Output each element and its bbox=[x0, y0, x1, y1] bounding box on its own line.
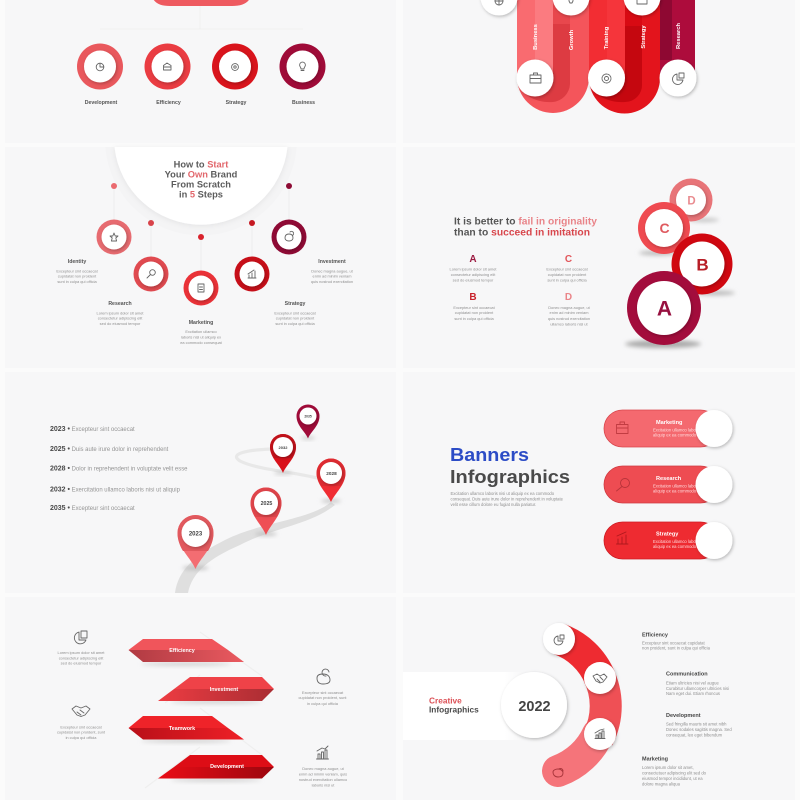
heading: It is better to fail in originality bbox=[454, 216, 597, 228]
ring: strategy: Strategy bbox=[226, 100, 246, 106]
icon and text: bar chart: enim ad minim veniam, quis bbox=[299, 772, 347, 776]
text: marketing: dolore magna aliqua bbox=[642, 782, 681, 786]
band: research bbox=[660, 0, 695, 78]
text: marketing: Marketing bbox=[642, 756, 668, 762]
heading bbox=[454, 216, 597, 238]
ball C: C bbox=[659, 220, 670, 236]
icon and text: pie chart: sed do eiusmod tempor bbox=[61, 660, 102, 666]
circle: top icon nodes bbox=[480, 0, 660, 16]
text block C: C bbox=[565, 254, 572, 265]
step: marketing: Marketing bbox=[189, 320, 213, 326]
heading bbox=[450, 445, 570, 487]
bottom icons bbox=[530, 73, 684, 85]
ball C bbox=[638, 202, 690, 256]
connector lines bbox=[100, 6, 303, 29]
band labels: Strategy bbox=[641, 25, 647, 49]
title bbox=[165, 160, 238, 200]
step: identity: cupidatat non proident bbox=[58, 274, 97, 278]
ball B bbox=[672, 234, 735, 296]
ring: business: Business bbox=[292, 100, 315, 106]
pin 2035: 2035 bbox=[304, 414, 312, 418]
step: investment bbox=[272, 183, 354, 284]
panel: vertical U-shaped bands bbox=[480, 0, 696, 114]
description: velit esse cillum dolore eu fugiat nulla pariatur. bbox=[450, 502, 536, 507]
ribbon: teamwork bbox=[128, 716, 244, 743]
pin 2023: 2023 bbox=[189, 532, 203, 538]
banner: strategy bbox=[604, 522, 732, 559]
node: pie bbox=[543, 623, 575, 655]
faint fold lines bbox=[145, 632, 262, 788]
text block B: sunt in culpa qui officia bbox=[454, 316, 494, 321]
year list: 2035 • Excepteur sint occaecat bbox=[50, 505, 135, 512]
step: strategy bbox=[234, 220, 317, 326]
text block C bbox=[546, 254, 589, 282]
ring: development: Development bbox=[85, 100, 118, 106]
text: communication bbox=[666, 672, 729, 696]
icon and text: bar chart bbox=[299, 746, 347, 788]
circle: bottom icon nodes bbox=[516, 60, 696, 96]
pin 2032 bbox=[270, 434, 296, 474]
banner: marketing: Excitation ullamco labor bbox=[653, 428, 698, 432]
icon and text: bar chart: nostrud exercitation ullamco bbox=[299, 777, 347, 782]
panel: creative infographics 2022 bbox=[403, 623, 732, 786]
text: communication: Nam eget dui. Etiam rhoncus bbox=[666, 691, 720, 696]
ball A: A bbox=[657, 298, 672, 320]
text block B: B bbox=[469, 292, 477, 303]
title: in 5 Steps bbox=[179, 190, 223, 200]
connector lines bbox=[114, 186, 289, 271]
step: identity: sunt in culpa qui officia bbox=[57, 279, 97, 284]
step: marketing: laboris nisi ut aliquip ex bbox=[181, 334, 221, 340]
text: development: consequat, leo eget bibendum bbox=[666, 732, 723, 738]
ball D: D bbox=[687, 196, 696, 208]
band label: Infographics bbox=[429, 704, 479, 714]
step: investment: Investment bbox=[318, 259, 346, 265]
step: marketing bbox=[180, 234, 223, 345]
text block D: D bbox=[565, 292, 572, 303]
ribbon: development bbox=[158, 755, 274, 782]
text: communication: Curabitur ullamcorper ultricies nisi bbox=[666, 686, 729, 691]
ribbon: efficiency: Efficiency bbox=[169, 648, 195, 654]
ring: efficiency bbox=[144, 44, 190, 106]
band label: Creative bbox=[429, 696, 462, 706]
winding road bbox=[175, 449, 335, 593]
text: efficiency bbox=[642, 632, 711, 650]
icon and text: handshake: in culpa qui officia bbox=[66, 735, 97, 740]
text block A: A bbox=[469, 254, 477, 265]
banner: marketing: Marketing bbox=[656, 420, 683, 426]
heading: than to succeed in imitation bbox=[454, 226, 590, 238]
panel: timeline map pins bbox=[50, 404, 346, 593]
text block D: ullamco laboris nisi ut bbox=[550, 322, 589, 326]
text: marketing bbox=[642, 756, 707, 786]
band labels: Growth bbox=[569, 29, 575, 50]
text block B: cupidatat non proident bbox=[455, 310, 494, 315]
year list: 2032 • Exercitation ullamco laboris nisi ut aliquip bbox=[50, 486, 181, 494]
step: strategy: cupidatat non proident bbox=[276, 316, 315, 320]
step: research: Research bbox=[108, 301, 132, 307]
ribbon: efficiency bbox=[128, 639, 244, 666]
panel: hierarchy with four rings bbox=[77, 0, 326, 106]
step: strategy: Strategy bbox=[285, 301, 305, 307]
band label bbox=[429, 696, 479, 714]
year list: 2028 • Dolor in reprehendent in voluptate velit esse bbox=[50, 466, 188, 472]
node: handshake bbox=[584, 662, 616, 694]
text: efficiency: Efficiency bbox=[642, 632, 669, 638]
ring: efficiency: Efficiency bbox=[156, 100, 181, 106]
text block D: enim ad minim veniam bbox=[550, 310, 588, 315]
top icons bbox=[495, 0, 647, 5]
ring: development bbox=[77, 44, 123, 106]
text block D: quis nostrud exercitation bbox=[548, 316, 590, 321]
band labels: Business bbox=[533, 24, 539, 50]
band: training and strategy bbox=[589, 0, 660, 114]
text block B bbox=[453, 292, 496, 321]
icon and text: piggy bank: in culpa qui officia bbox=[307, 701, 339, 706]
panel: 5 steps brand bbox=[56, 147, 354, 345]
text block A: consectetur adipiscing elit bbox=[451, 272, 496, 277]
step: investment: enim ad minim veniam bbox=[313, 274, 351, 278]
arc: bottom segment bbox=[558, 734, 598, 771]
white band bbox=[403, 672, 523, 740]
pin 2035 bbox=[296, 404, 320, 439]
ring: business bbox=[280, 44, 326, 106]
text: communication: Etiam ultricies nisi vel augue bbox=[666, 680, 720, 686]
description bbox=[450, 491, 564, 507]
year list bbox=[50, 426, 188, 512]
banner: research: aliquip ex ea commodo bbox=[653, 488, 697, 494]
text block C: cupidatat non proident bbox=[548, 272, 587, 277]
step: strategy: Excepteur sint occaecat bbox=[274, 310, 317, 316]
band labels: Research bbox=[676, 22, 682, 49]
text: efficiency: non proident, sunt in culpa qui officia bbox=[642, 646, 711, 650]
ball B: B bbox=[696, 256, 709, 274]
arc: middle segment bbox=[598, 674, 606, 738]
text: marketing: eiusmod tempor incididunt, ut ea bbox=[642, 776, 703, 781]
description: Excitation ullamco laboris nisi ut aliquip ex ea commodo bbox=[450, 491, 555, 496]
step: identity: Identity bbox=[68, 259, 86, 265]
band labels bbox=[533, 22, 682, 50]
ring: strategy bbox=[212, 44, 258, 106]
year list: 2023 • Excepteur sint occaecat bbox=[50, 426, 135, 433]
step: research: consectetur adipiscing elit bbox=[98, 316, 143, 320]
text block D bbox=[548, 292, 591, 326]
text block A: Lorem ipsum dolor sit amet bbox=[450, 266, 497, 272]
arc: top segment bbox=[559, 639, 600, 678]
step: investment: Donec magna augue, ut bbox=[311, 268, 354, 274]
step: investment: quis nostrud exercitation bbox=[311, 279, 353, 284]
ribbon: investment bbox=[158, 677, 274, 704]
pin 2028 bbox=[316, 458, 346, 502]
step: identity: Excepteur sint occaecat bbox=[56, 268, 99, 274]
text block C: sunt in culpa qui officia bbox=[547, 278, 587, 282]
title: From Scratch bbox=[171, 180, 231, 190]
text: marketing: consectetuer adipiscing elit sed do bbox=[642, 770, 707, 776]
text block D: Donec magna augue, ut bbox=[548, 305, 591, 310]
text: development: Donec sodales sagittis magna. Sed bbox=[666, 727, 732, 732]
year list: 2025 • Duis aute irure dolor in reprehendent bbox=[50, 446, 169, 453]
panel: folded ribbons bbox=[57, 631, 347, 788]
banner: research: Research bbox=[656, 476, 682, 482]
step: research: Lorem ipsum dolor sit amet bbox=[97, 310, 144, 316]
icon and text: piggy bank: Excepteur sint occaecat bbox=[302, 690, 344, 695]
step: identity bbox=[56, 183, 132, 284]
icon and text: piggy bank: cupidatat non proident, sunt bbox=[298, 695, 347, 700]
top pill bbox=[150, 0, 253, 6]
pin 2023 bbox=[178, 515, 214, 570]
step: strategy: sunt in culpa qui officia bbox=[275, 321, 315, 326]
text: development: Sed fringilla mauris sit amet nibh bbox=[666, 722, 727, 726]
title: How to Start bbox=[174, 160, 228, 170]
description: consequat. Duis aute irure dolor in reprehenderit in voluptate bbox=[450, 496, 564, 502]
text: development: Development bbox=[666, 713, 701, 719]
icon on arc end bbox=[553, 768, 563, 777]
heading: Banners bbox=[450, 445, 529, 465]
icon and text: pie chart: consectetur adipiscing elit bbox=[59, 656, 104, 660]
text block B: Excepteur sint occaecat bbox=[453, 305, 496, 310]
banner: marketing: aliquip ex ea commodo bbox=[653, 432, 697, 438]
text block A: sed do eiusmod tempor bbox=[453, 278, 494, 282]
icon and text: bar chart: laboris nisi ut bbox=[312, 782, 335, 788]
icon and text: pie chart bbox=[58, 631, 105, 666]
faint outer ring bbox=[105, 147, 297, 235]
band: business and growth bbox=[517, 0, 589, 113]
node: chart bbox=[584, 718, 616, 750]
icon and text: bar chart: Donec magna augue, ut bbox=[302, 766, 345, 771]
ribbon: teamwork: Teamwork bbox=[169, 726, 195, 732]
title: Your Own Brand bbox=[165, 170, 238, 180]
panel: originality quote with ABCD bbox=[450, 178, 735, 348]
heading: Infographics bbox=[450, 467, 570, 487]
center disc 2022: 2022 bbox=[518, 699, 551, 715]
text: efficiency: Excepteur sint occaecat cupidatat bbox=[642, 640, 705, 646]
banner: research: Excitation ullamco labor bbox=[653, 484, 698, 488]
pin 2025: 2025 bbox=[261, 501, 272, 507]
text: development bbox=[666, 713, 732, 738]
icon and text: handshake bbox=[57, 706, 106, 740]
band: research shade bbox=[660, 0, 672, 60]
banner: research bbox=[604, 466, 732, 503]
banner: marketing bbox=[604, 410, 732, 447]
icon and text: handshake: cupidatat non proident, sunt bbox=[57, 730, 106, 734]
step: marketing: ea commodo consequat bbox=[180, 340, 223, 345]
big white semicircle bbox=[114, 147, 288, 225]
text: communication: Communication bbox=[666, 672, 708, 678]
text block C: Excepteur sint occaecat bbox=[546, 266, 589, 272]
ball A bbox=[625, 271, 701, 348]
icon and text: handshake: Excepteur sint occaecat bbox=[60, 724, 103, 730]
pin 2032: 2032 bbox=[279, 445, 288, 450]
icon and text: piggy bank bbox=[298, 669, 347, 706]
ball D bbox=[670, 178, 719, 222]
center disc 2022 bbox=[501, 672, 567, 738]
step: marketing: Excitation ullamco bbox=[185, 329, 217, 334]
icon and text: pie chart: Lorem ipsum dolor sit amet bbox=[58, 650, 105, 655]
banner: strategy: Excitation ullamco labor bbox=[653, 539, 698, 544]
ribbon: development: Development bbox=[210, 764, 244, 770]
panel: banners infographics bbox=[450, 410, 732, 559]
step: research: sed do eiusmod tempor bbox=[100, 321, 141, 326]
text block A bbox=[450, 254, 497, 282]
banner: strategy: aliquip ex ea commodo bbox=[653, 544, 697, 549]
pin 2028: 2028 bbox=[326, 471, 337, 476]
step: research bbox=[97, 220, 168, 326]
banner: strategy: Strategy bbox=[656, 532, 679, 538]
ribbon: investment: Investment bbox=[210, 687, 238, 693]
text: marketing: Lorem ipsum dolor sit amet, bbox=[642, 765, 694, 770]
pin 2025 bbox=[250, 487, 282, 536]
band labels: Training bbox=[604, 26, 610, 49]
